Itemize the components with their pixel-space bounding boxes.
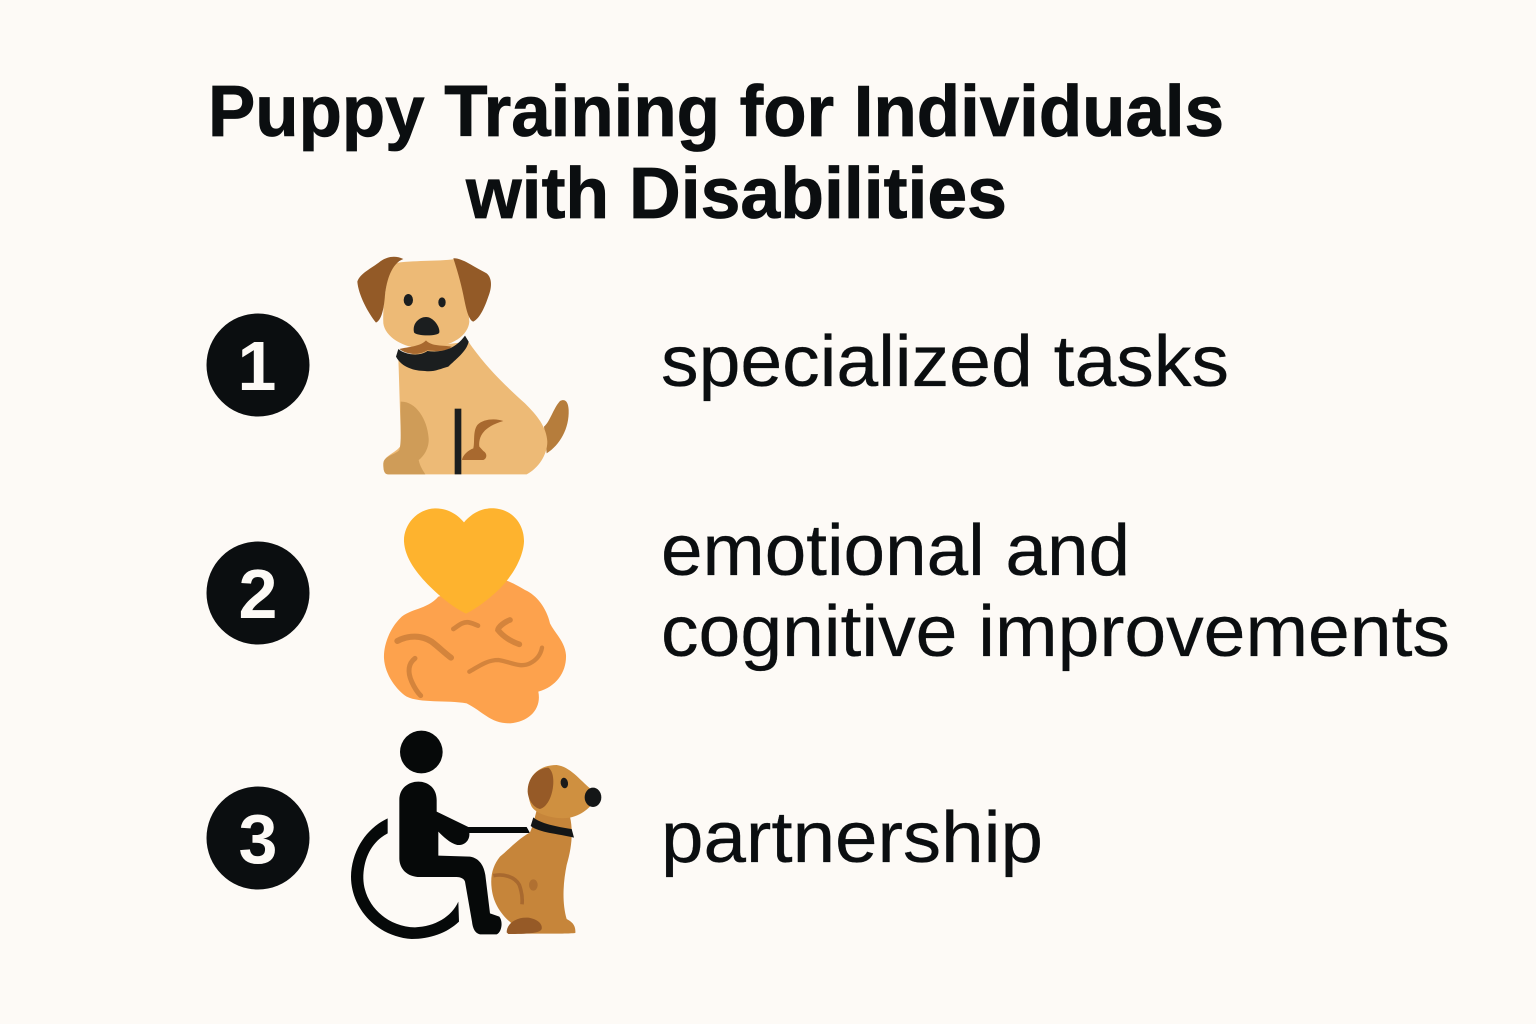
number badge 3 [206,786,310,890]
number badge 1: 1 [238,327,276,405]
number badge 2: 2 [239,555,277,633]
title: with Disabilities [465,154,1007,234]
label: specialized tasks: specialized tasks [661,322,1229,402]
heart [404,508,524,614]
guide dog [491,765,601,934]
number badge 2 [206,542,310,644]
number badge 1 [206,314,310,416]
icon: wheelchair user with guide dog [351,731,601,939]
label: partnership: partnership [661,798,1043,878]
title: Puppy Training for Individuals [208,72,1224,152]
label: emotional and cognitive improvements [661,511,1450,672]
icon: sitting puppy [357,257,569,474]
number badge 3: 3 [239,800,277,878]
label: emotional and cognitive improvements: emotional and [661,511,1130,591]
label: emotional and cognitive improvements: cognitive improvements [661,592,1450,672]
wheelchair user [351,731,530,939]
icon: heart and brain [384,508,566,723]
title [208,72,1224,234]
brain folds [397,620,542,696]
brain [384,580,566,723]
